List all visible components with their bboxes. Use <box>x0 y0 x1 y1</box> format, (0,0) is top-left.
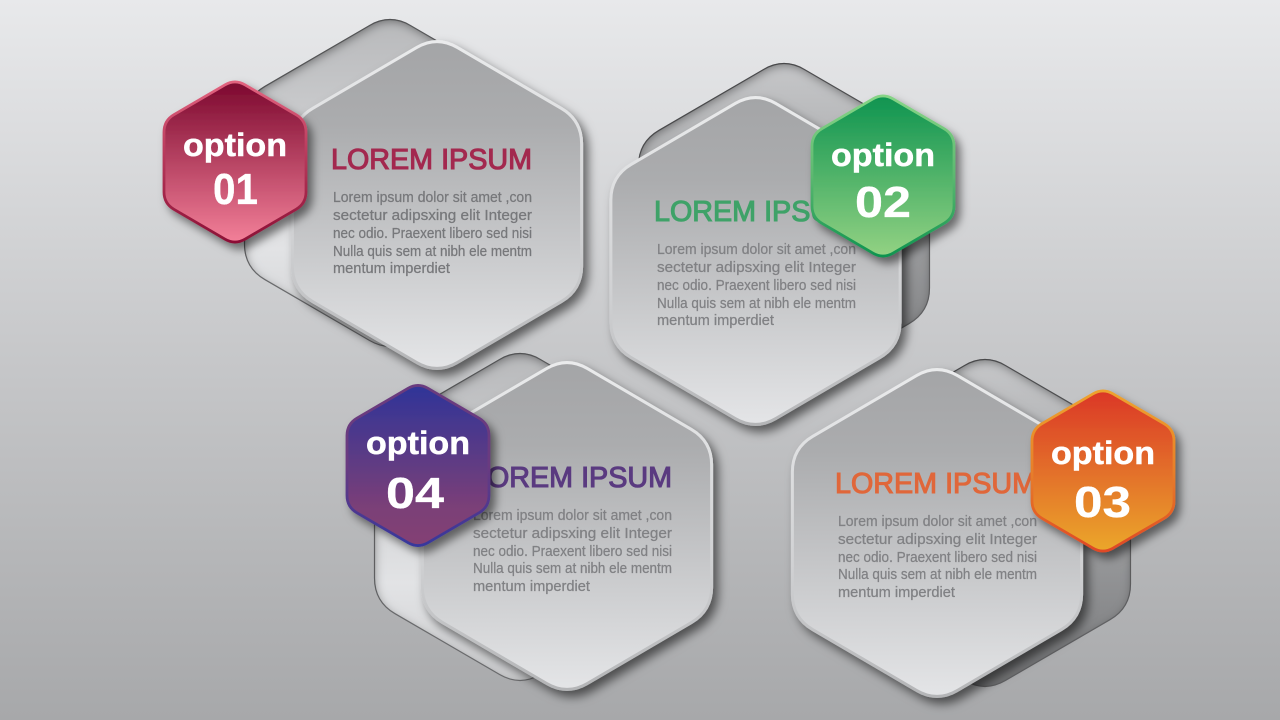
text block 1 <box>333 190 532 277</box>
panel: card 1 <box>245 20 582 368</box>
badge: option 01: option <box>183 127 287 163</box>
badge: option 03: option <box>1051 435 1155 471</box>
text block 1: sectetur adipsxing elit Integer <box>333 208 532 224</box>
front hexagon 3 <box>792 370 1082 696</box>
back hexagon 2 <box>639 64 929 390</box>
back hexagon 3 <box>840 360 1130 686</box>
text block 4: mentum imperdiet <box>473 579 590 595</box>
badge: option 02 <box>812 96 954 256</box>
back hexagon 1 <box>245 20 535 346</box>
text block 2: sectetur adipsxing elit Integer <box>657 260 856 276</box>
heading 1: LOREM IPSUM <box>331 144 532 176</box>
front hexagon 4 <box>422 363 712 689</box>
back hexagon 4 <box>375 354 665 680</box>
badge: option 02: option <box>831 137 935 173</box>
text block 4: Lorem ipsum dolor sit amet ,con <box>473 508 672 524</box>
badge: option 03 <box>1032 391 1174 551</box>
badge: option 04: option <box>366 425 470 461</box>
text block 4: Nulla quis sem at nibh ele mentm <box>473 561 672 577</box>
text block 3 <box>838 514 1037 601</box>
badge: option 04: 04 <box>386 469 445 518</box>
text block 3: Nulla quis sem at nibh ele mentm <box>838 567 1037 583</box>
text block 4: sectetur adipsxing elit Integer <box>473 526 672 542</box>
badge: option 01 <box>164 82 306 242</box>
text block 3: mentum imperdiet <box>838 585 955 601</box>
front hexagon 1 <box>292 42 582 368</box>
heading 2: LOREM IPSUM <box>654 196 855 228</box>
text block 2 <box>657 242 856 329</box>
text block 2: mentum imperdiet <box>657 313 774 329</box>
panel: card 4 <box>375 354 712 689</box>
text block 1: nec odio. Praexent libero sed nisi <box>333 226 532 242</box>
badge: option 04 <box>347 385 489 546</box>
text block 2: Nulla quis sem at nibh ele mentm <box>657 296 856 312</box>
text block 3: sectetur adipsxing elit Integer <box>838 532 1037 548</box>
panel: card 2 <box>611 64 929 424</box>
text block 3: nec odio. Praexent libero sed nisi <box>838 550 1037 566</box>
text block 2: Lorem ipsum dolor sit amet ,con <box>657 242 856 258</box>
text block 4 <box>473 508 672 595</box>
front hexagon 2 <box>611 98 900 424</box>
badge: option 02: 02 <box>855 178 911 227</box>
badge: option 01: 01 <box>213 165 258 214</box>
badge: option 03: 03 <box>1074 478 1131 527</box>
heading 3: LOREM IPSUM <box>835 468 1036 500</box>
heading 4: LOREM IPSUM <box>471 462 672 494</box>
text block 3: Lorem ipsum dolor sit amet ,con <box>838 514 1037 530</box>
text block 1: Lorem ipsum dolor sit amet ,con <box>333 190 532 206</box>
text block 4: nec odio. Praexent libero sed nisi <box>473 544 672 560</box>
text block 1: mentum imperdiet <box>333 261 450 277</box>
text block 2: nec odio. Praexent libero sed nisi <box>657 278 856 294</box>
panel: card 3 <box>792 360 1130 696</box>
text block 1: Nulla quis sem at nibh ele mentm <box>333 244 532 260</box>
